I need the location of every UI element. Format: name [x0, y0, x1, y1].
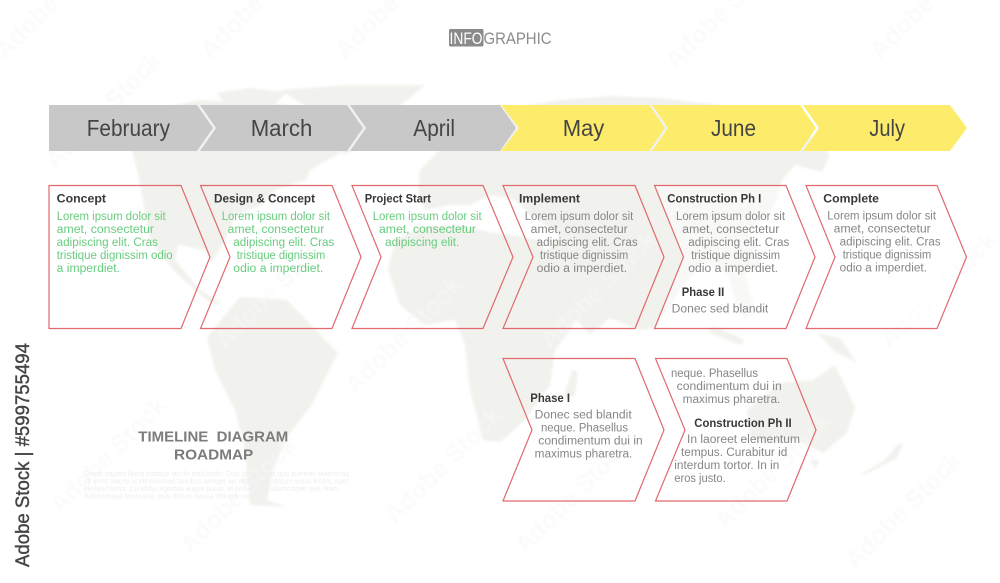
panel: Design & Concept	[200, 186, 361, 328]
watermark lettering: Adobe Stock	[874, 226, 1000, 354]
arrow: June	[652, 105, 816, 151]
watermark lettering: Adobe Stock	[379, 401, 507, 529]
panel: Design & Concept: tristique dignissim	[237, 250, 325, 262]
panel: Construction Ph II: In laoreet elementum	[687, 434, 800, 446]
panel: Project Start: adipiscing elit.	[385, 237, 459, 249]
panel: Construction Ph I: amet, consectetur	[682, 224, 779, 236]
panel: Phase I: maximus pharetra.	[535, 448, 632, 460]
arrow: July: July	[869, 115, 905, 141]
arrow: March: March	[251, 115, 312, 141]
panel: Project Start: Lorem ipsum dolor sit	[373, 211, 482, 223]
title: infographic: INFO	[450, 29, 482, 48]
stock credit label: Adobe Stock | #599755494	[12, 343, 34, 567]
panel: Implement: tristique dignissim	[540, 250, 628, 262]
text block: faint description: sit amet mauris ut elit euismod faucibus semper vel nibh. Proin dictum luctus lectus, eget	[84, 478, 348, 486]
panel: Construction Ph II: condimentum dui in	[677, 381, 782, 393]
arrow: May	[501, 105, 665, 151]
panel: Implement: amet, consectetur	[531, 224, 628, 236]
panel: Project Start	[352, 186, 513, 328]
panel: Construction Ph I: Donec sed blandit	[672, 304, 769, 316]
panel: Construction Ph II: interdum tortor. In in	[674, 460, 779, 472]
arrow: April: April	[413, 115, 455, 141]
text block: faint description: eleifend tortor. Curabitur egestas augue purus, et posuere mi ullamcorper sed. Nam	[84, 486, 338, 493]
text block: faint description: Pellentesque lorem erat, quis dictum massa rhoncus non.	[84, 494, 254, 500]
panel: Construction Ph I: tristique dignissim	[691, 250, 780, 262]
panel: Concept: a imperdiet.	[57, 263, 120, 275]
panel: Construction Ph II: maximus pharetra.	[683, 394, 780, 406]
title: infographic: GRAPHIC	[484, 29, 552, 48]
panel: Complete: Lorem ipsum dolor sit	[827, 210, 937, 222]
arrow: February	[49, 105, 213, 151]
arrow: June: June	[711, 115, 756, 141]
panel: Concept: Lorem ipsum dolor sit	[57, 211, 166, 223]
timeline month arrows	[49, 105, 967, 151]
panel: Implement: Lorem ipsum dolor sit	[525, 211, 634, 223]
panel: Construction Ph I: Lorem ipsum dolor sit	[676, 211, 786, 223]
panel: Phase I: Donec sed blandit	[535, 410, 633, 422]
watermark lettering: Adobe Stock	[39, 46, 167, 174]
panel: Design & Concept: Design & Concept	[214, 192, 315, 206]
panel: Phase I	[503, 358, 664, 501]
panel: Construction Ph I: Phase II	[682, 285, 724, 299]
panel: Implement: odio a imperdiet.	[537, 263, 627, 275]
watermark lettering: Adobe Stock	[44, 391, 172, 519]
panel: Complete: Complete	[823, 192, 879, 206]
panel: Construction Ph II	[656, 358, 816, 501]
panel: Phase I: neque. Phasellus	[541, 422, 628, 434]
watermark lettering: Adobe Stock	[709, 406, 837, 534]
text block: faint description	[84, 471, 349, 500]
text block: faint description: Donec sagittis libero tristique iaculis sollicitudin. Duis congue nisi quis pulvinar. Maecenas	[84, 471, 349, 478]
panel: Concept	[49, 186, 210, 328]
arrow: July	[803, 105, 967, 151]
panel: Complete	[806, 186, 966, 328]
world map background	[132, 85, 903, 507]
panel: Construction Ph I: odio a imperdiet.	[688, 263, 778, 275]
panel: Project Start: amet, consectetur	[379, 224, 476, 236]
arrow: March	[200, 105, 363, 151]
watermark lettering: Adobe Stock	[174, 431, 302, 559]
panel: Construction Ph I	[654, 186, 815, 328]
heading: timeline diagram roadmap: TIMELINE DIAGRAM	[138, 428, 288, 446]
panel: Implement	[503, 186, 664, 328]
heading: timeline diagram roadmap: ROADMAP	[174, 446, 253, 464]
arrow: February: February	[87, 115, 170, 141]
panel: Concept: Concept	[57, 192, 106, 206]
watermark lettering: Adobe Stock	[209, 226, 337, 354]
panel: Construction Ph II: tempus. Curabitur id	[681, 447, 787, 459]
arrow: April	[350, 105, 516, 151]
panel: Project Start: Project Start	[365, 192, 431, 206]
panel: Construction Ph II: Construction Ph II	[694, 416, 792, 430]
panel: Design & Concept: adipiscing elit. Cras	[233, 237, 335, 249]
watermark lettering: Adobe Stock	[534, 226, 662, 354]
panel: Construction Ph I: adipiscing elit. Cras	[688, 237, 790, 249]
watermark lettering: Adobe Stock	[839, 446, 967, 574]
panel: Concept: amet, consectetur	[57, 224, 154, 236]
panel: Design & Concept: odio a imperdiet.	[233, 263, 323, 275]
panel: Complete: amet, consectetur	[834, 224, 931, 236]
arrow: May: May	[563, 115, 605, 141]
panel: Phase I: Phase I	[530, 391, 570, 405]
panel: Construction Ph II: eros justo.	[674, 473, 726, 485]
panel: Implement: adipiscing elit. Cras	[537, 237, 638, 249]
panel: Complete: odio a imperdiet.	[840, 262, 927, 274]
panel: Concept: adipiscing elit. Cras	[57, 237, 158, 249]
watermark lettering: Adobe Stock	[509, 431, 637, 559]
title: infographic	[449, 29, 552, 48]
heading: timeline diagram roadmap	[138, 428, 288, 464]
panel: Implement: Implement	[519, 192, 580, 206]
panel: Construction Ph I: Construction Ph I	[667, 192, 761, 206]
watermark lettering: Adobe Stock	[339, 271, 467, 399]
panel: Design & Concept: amet, consectetur	[228, 224, 324, 236]
panel: Construction Ph II: neque. Phasellus	[671, 368, 758, 380]
panel: Phase I: condimentum dui in	[538, 436, 643, 448]
panel: Complete: tristique dignissim	[843, 250, 931, 262]
panel: Design & Concept: Lorem ipsum dolor sit	[222, 211, 331, 223]
panel: Concept: tristique dignissim odio	[57, 250, 173, 262]
panel: Complete: adipiscing elit. Cras	[840, 236, 941, 248]
